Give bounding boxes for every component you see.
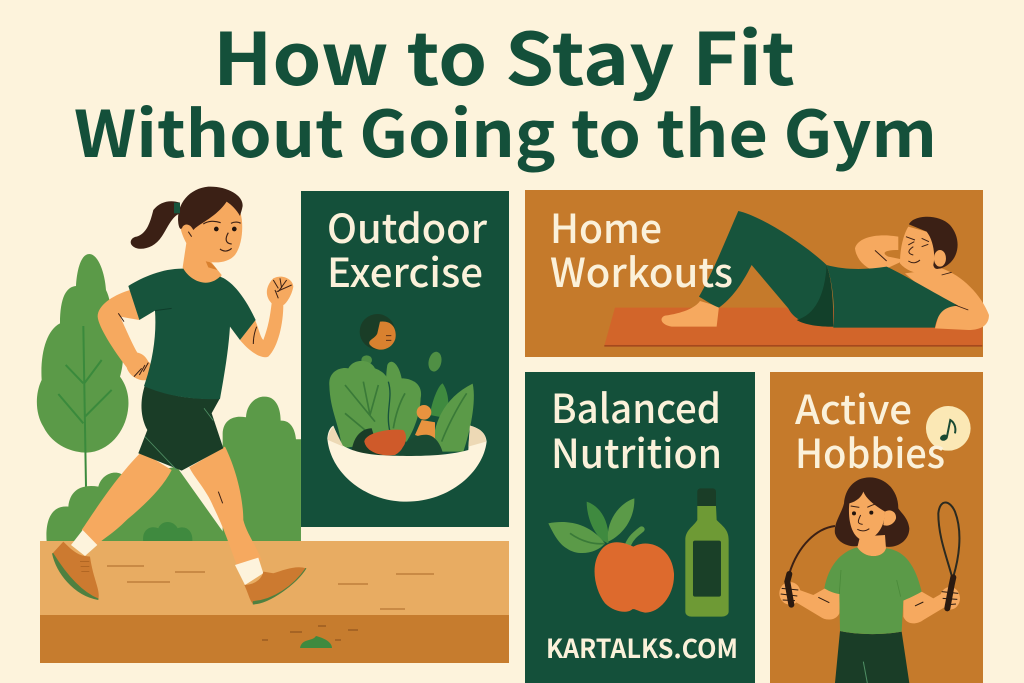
heading: active hobbies xyxy=(795,378,945,480)
foot xyxy=(662,301,719,327)
head xyxy=(900,227,938,273)
illustration: woman running xyxy=(53,187,306,604)
ground path xyxy=(40,541,509,663)
heading: outdoor exercise: Outdoor xyxy=(327,197,488,255)
icon: olive oil bottle xyxy=(685,488,729,617)
title xyxy=(74,1,937,176)
icon: salad bowl with face xyxy=(327,314,487,502)
title: How to Stay Fit xyxy=(213,1,795,106)
shirt xyxy=(824,547,922,634)
rope handles xyxy=(787,574,791,605)
panel: active hobbies xyxy=(770,372,983,683)
illustration: trees and bushes xyxy=(37,254,301,542)
panel: balanced nutrition xyxy=(525,372,755,683)
rope loops xyxy=(789,526,835,573)
illustration: man doing crunches xyxy=(604,211,989,347)
shirt xyxy=(128,269,256,399)
heading: outdoor exercise xyxy=(327,197,488,299)
heading: active hobbies: Hobbies xyxy=(795,422,945,480)
heading: home workouts xyxy=(550,197,733,299)
shoes xyxy=(53,542,99,599)
mat xyxy=(604,308,982,346)
illustration: woman with jump rope xyxy=(779,477,960,683)
arm behind head right xyxy=(905,268,989,330)
title: Without Going to the Gym xyxy=(74,84,937,176)
legs xyxy=(82,452,172,545)
heading: balanced nutrition xyxy=(551,377,722,480)
heading: home workouts: Home xyxy=(550,197,662,255)
heading: balanced nutrition: Nutrition xyxy=(551,422,722,480)
pants xyxy=(835,631,909,683)
heading: outdoor exercise: Exercise xyxy=(327,241,483,299)
neck xyxy=(857,535,886,556)
arms and hands xyxy=(795,588,840,620)
pants xyxy=(699,211,833,327)
arms xyxy=(98,290,152,380)
icon: music note xyxy=(926,406,971,451)
raised arm behind head xyxy=(855,235,905,272)
ponytail xyxy=(131,201,180,249)
panel: outdoor exercise xyxy=(301,191,509,527)
heading: active hobbies: Active xyxy=(795,378,912,436)
face xyxy=(849,492,885,541)
panel: home workouts xyxy=(525,190,989,357)
head xyxy=(180,197,242,262)
brand text: KARTALKS.COM xyxy=(546,629,738,666)
shorts xyxy=(138,385,223,471)
heading: home workouts: Workouts xyxy=(550,241,733,299)
icon: apple with leaves xyxy=(548,498,674,613)
shirt xyxy=(827,265,958,328)
neck xyxy=(183,237,222,287)
fingers xyxy=(781,588,958,606)
hair xyxy=(835,477,909,547)
heading: balanced nutrition: Balanced xyxy=(551,377,721,435)
